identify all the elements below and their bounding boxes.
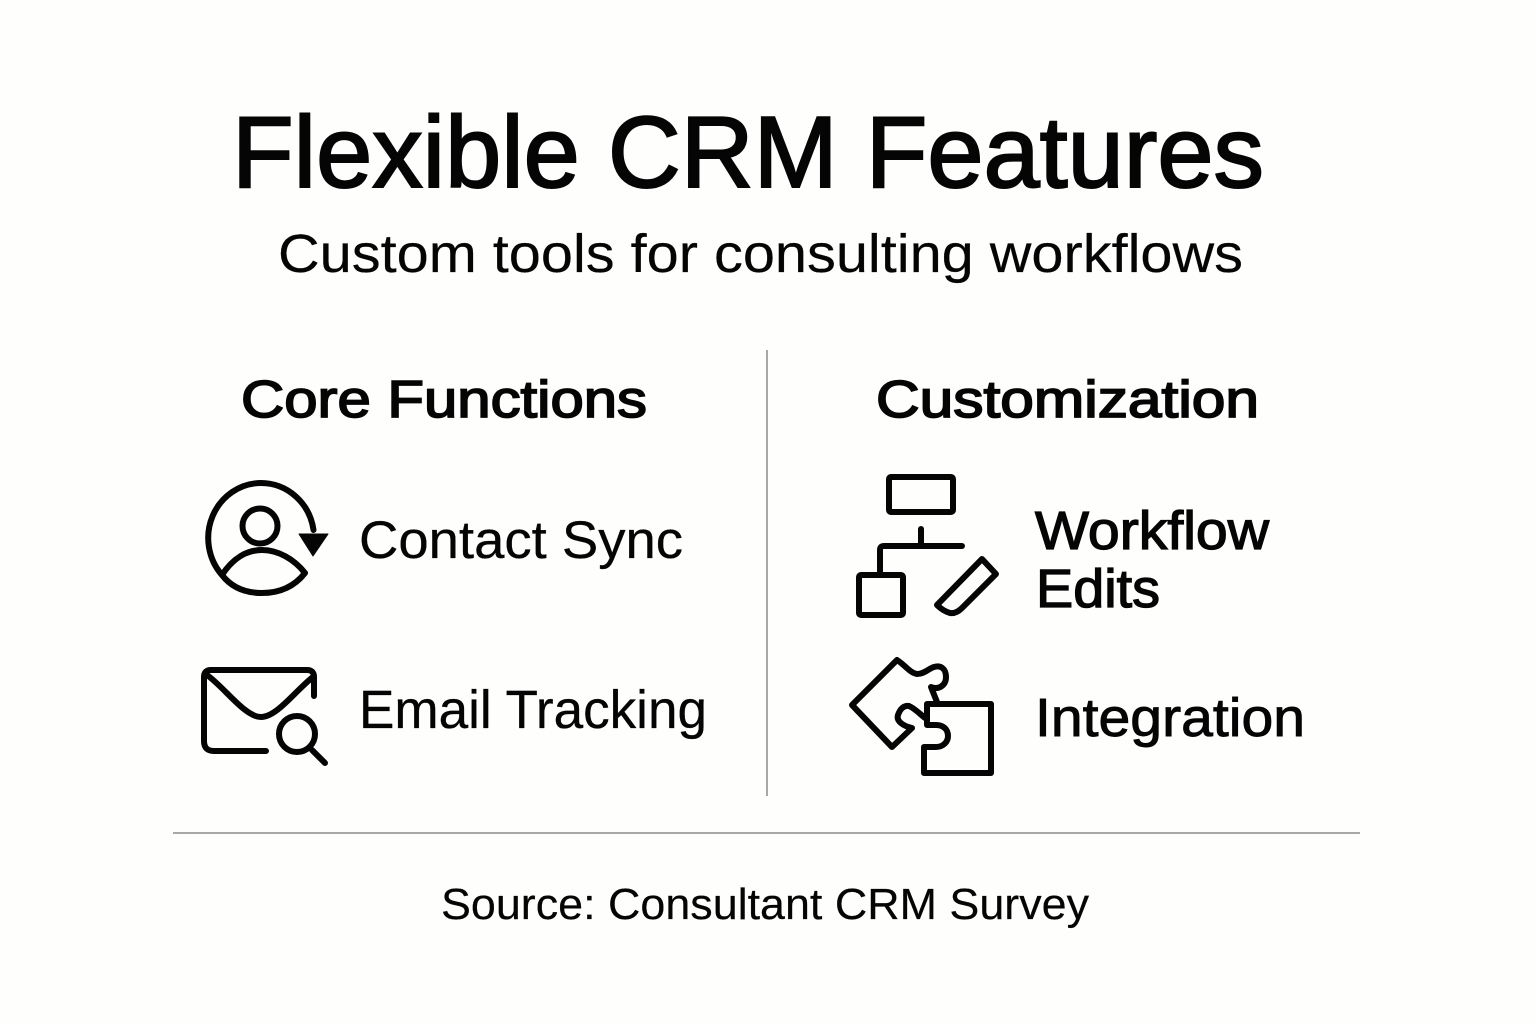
label: workflow edits: Workflow (1035, 501, 1270, 561)
label: workflow edits: Edits (1036, 559, 1160, 619)
label: email tracking: Email Tracking (359, 680, 707, 740)
panel: core functions (204, 371, 707, 763)
label: workflow edits (1035, 501, 1270, 619)
panel: customization (852, 371, 1305, 773)
subtitle: Custom tools for consulting workflows (278, 224, 1243, 284)
label: integration: Integration (1035, 688, 1305, 748)
icon: integration (852, 660, 991, 773)
icon: workflow edits (859, 477, 996, 615)
heading: core functions: Core Functions (241, 371, 647, 429)
icon: contact sync (208, 483, 328, 593)
label: contact sync: Contact Sync (359, 511, 683, 570)
source note: Source: Consultant CRM Survey (441, 880, 1089, 929)
icon: email tracking (204, 670, 325, 763)
heading: customization: Customization (876, 371, 1259, 429)
title: Flexible CRM Features (232, 97, 1264, 209)
